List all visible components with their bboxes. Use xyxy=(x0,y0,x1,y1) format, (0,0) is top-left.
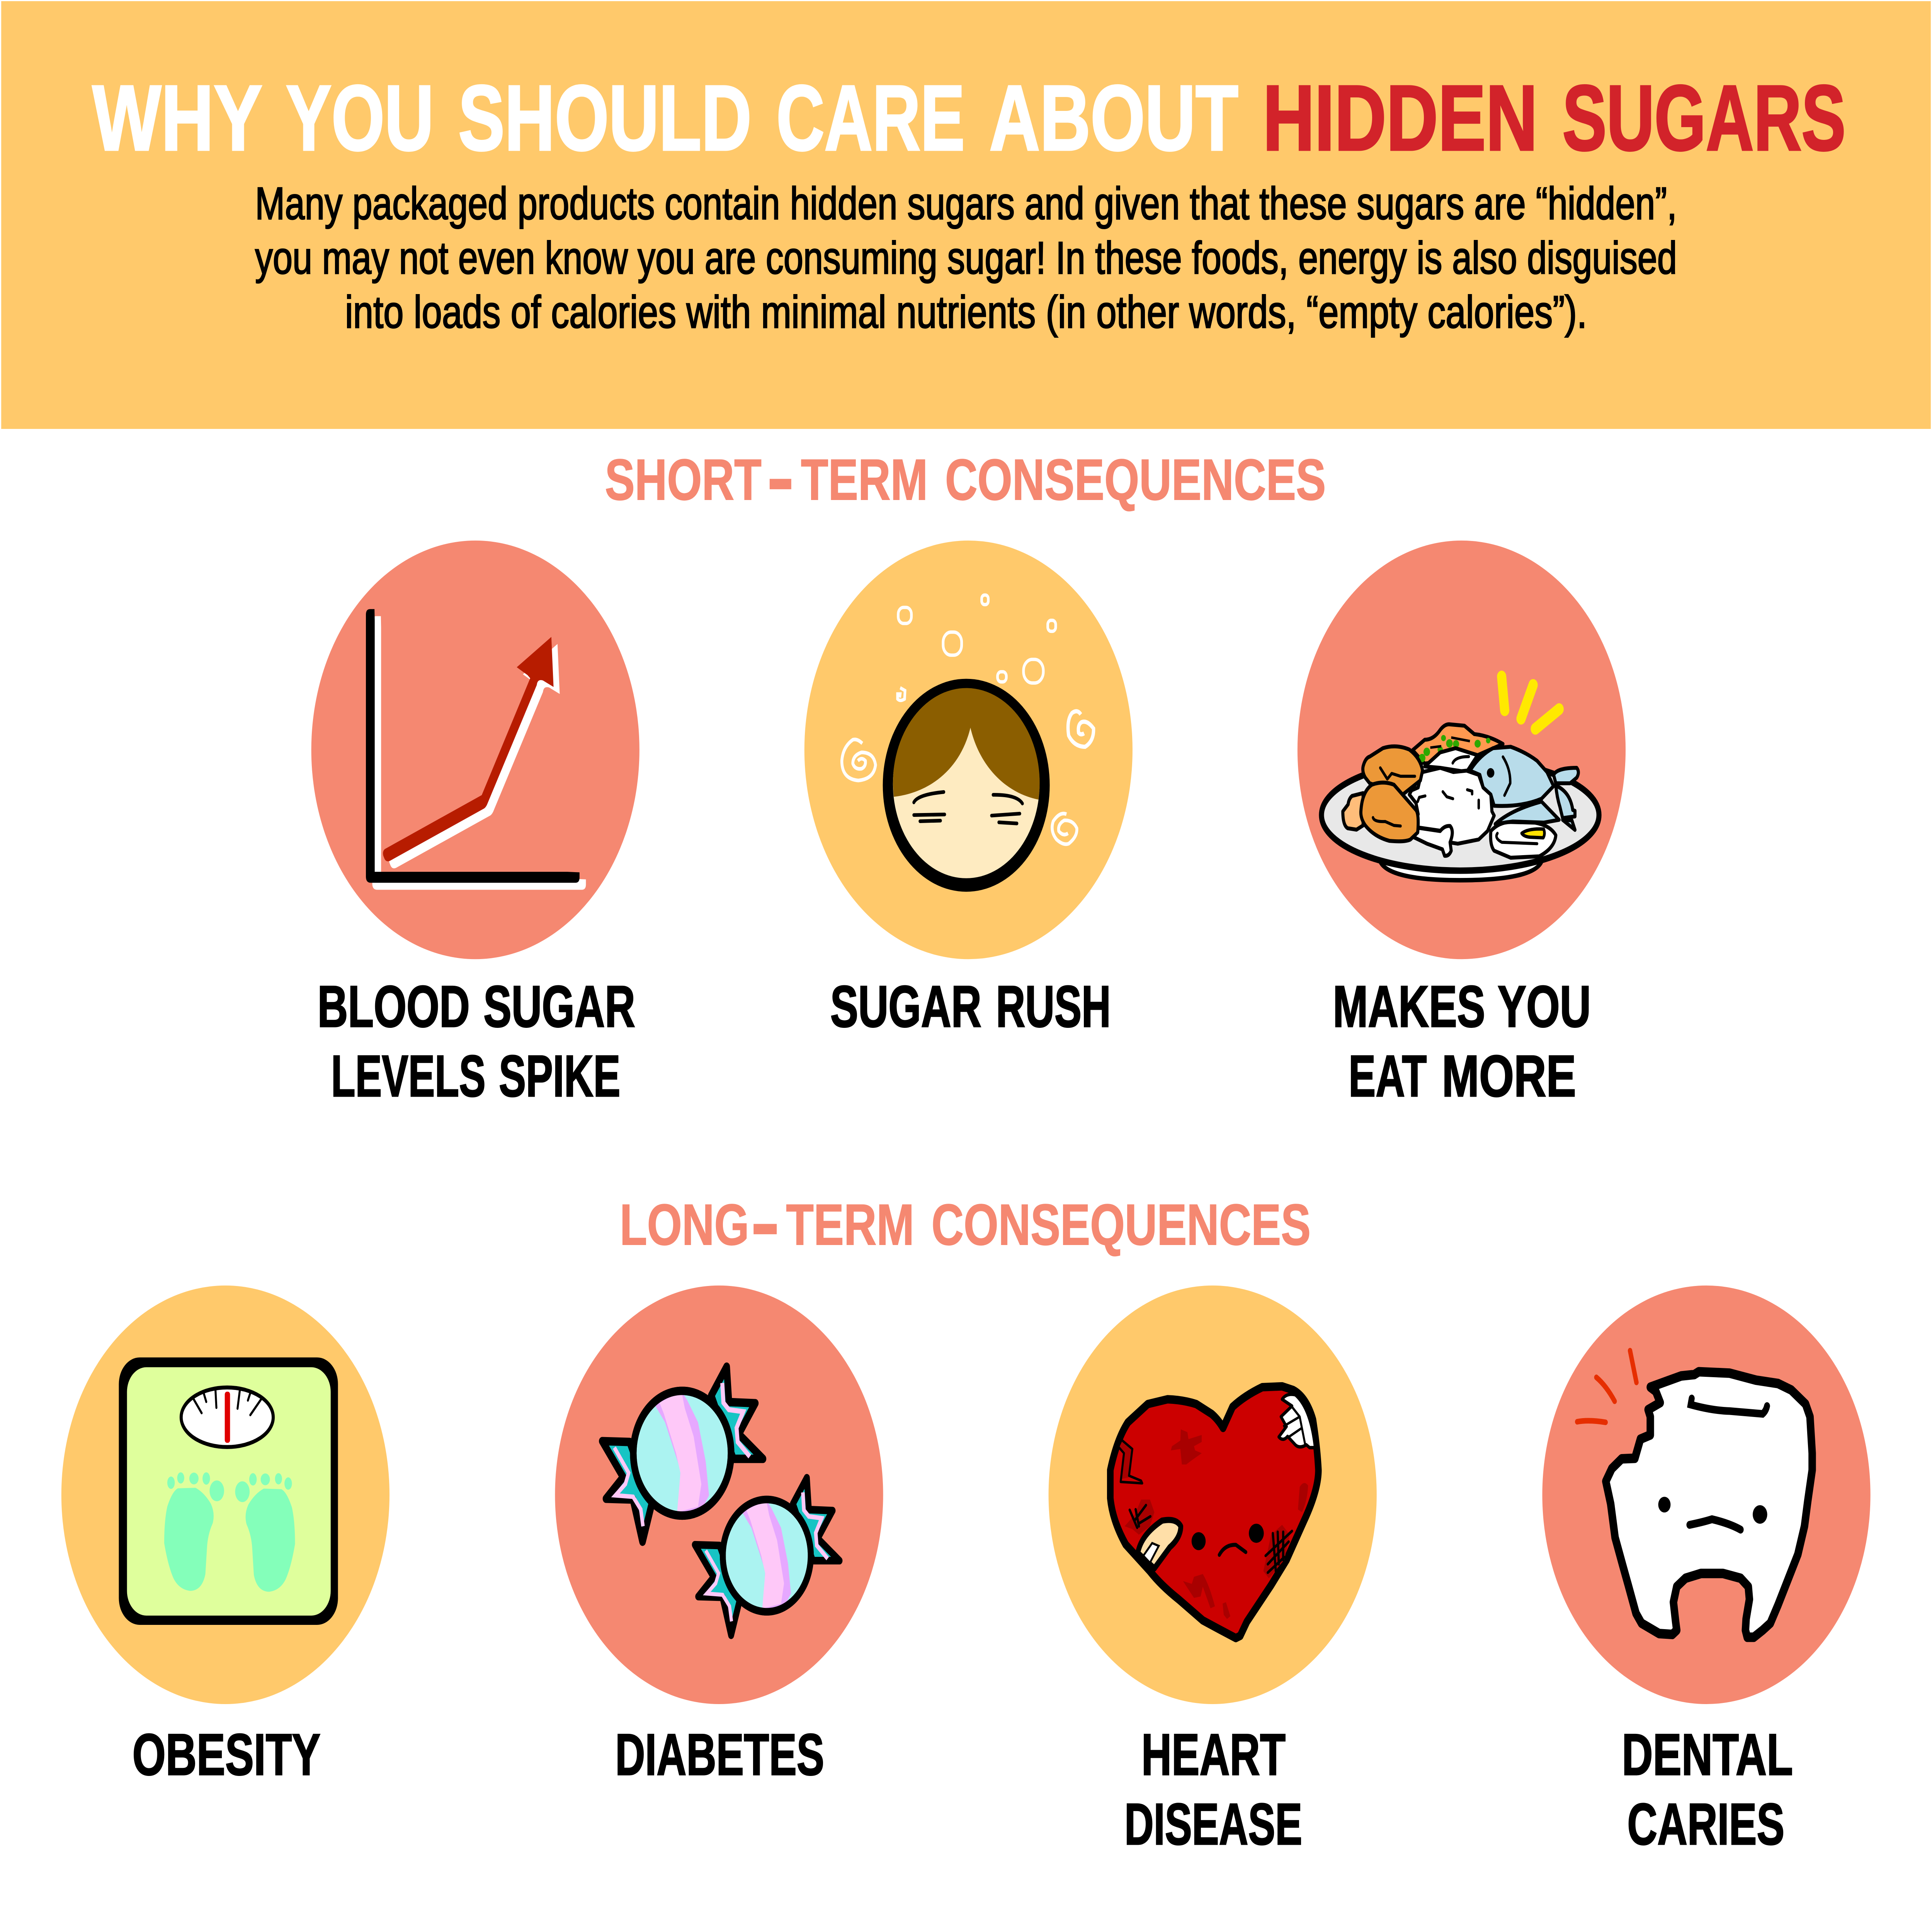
icon: bathroom scale xyxy=(61,1286,389,1704)
heading: short-term consequences: – xyxy=(770,447,791,512)
heading: long-term consequences: LONG xyxy=(620,1192,749,1257)
intro text xyxy=(255,178,1677,338)
item: dental caries xyxy=(1542,1286,1871,1857)
label: LEVELS xyxy=(331,1043,486,1109)
label: RUSH xyxy=(996,973,1111,1039)
heading: short-term consequences: SHORT xyxy=(605,447,762,512)
item: obesity xyxy=(61,1286,389,1787)
item: makes you eat more xyxy=(1298,541,1626,1109)
label: BLOOD xyxy=(318,973,470,1039)
intro text: Many packaged products contain hidden sugars and given that these sugars are “hidden”, xyxy=(255,178,1677,229)
item: blood sugar levels spike xyxy=(311,541,639,1109)
label: EAT xyxy=(1349,1043,1427,1109)
icon: dizzy face xyxy=(804,541,1133,959)
icon: candies xyxy=(555,1286,883,1704)
intro text: into loads of calories with minimal nutrients (in other words, “empty calories”). xyxy=(345,287,1587,338)
heading: short-term consequences xyxy=(605,447,1326,512)
label xyxy=(318,973,635,1109)
item: diabetes xyxy=(555,1286,883,1787)
label: MORE xyxy=(1442,1043,1576,1109)
label: OBESITY xyxy=(133,1721,320,1787)
title: SHOULD xyxy=(458,66,752,170)
label: SPIKE xyxy=(499,1043,621,1109)
header banner xyxy=(1,1,1931,429)
heading: short-term consequences: TERM xyxy=(801,447,928,512)
title: YOU xyxy=(286,66,434,170)
heading: long-term consequences: – xyxy=(754,1192,776,1257)
label: CARIES xyxy=(1627,1791,1784,1857)
title: WHY xyxy=(92,66,262,170)
label: DIABETES xyxy=(615,1721,824,1787)
label xyxy=(1333,973,1591,1109)
heading: long-term consequences: TERM xyxy=(786,1192,914,1257)
heading: long-term consequences: CONSEQUENCES xyxy=(932,1192,1311,1257)
label: SUGAR xyxy=(830,973,981,1039)
title: SUGARS xyxy=(1563,66,1846,170)
intro text: you may not even know you are consuming sugar! In these foods, energy is also disguised xyxy=(255,233,1677,284)
label: HEART xyxy=(1141,1721,1286,1787)
title: CARE xyxy=(776,66,965,170)
title xyxy=(92,66,1846,170)
label xyxy=(830,973,1111,1039)
item: heart disease xyxy=(1049,1286,1377,1857)
icon: plate of food xyxy=(1298,541,1626,959)
label: MAKES xyxy=(1333,973,1485,1039)
heading: short-term consequences: CONSEQUENCES xyxy=(945,447,1326,512)
label: YOU xyxy=(1498,973,1591,1039)
label: DENTAL xyxy=(1622,1721,1793,1787)
heading: long-term consequences xyxy=(620,1192,1311,1257)
item: sugar rush xyxy=(804,541,1133,1039)
label xyxy=(1124,1721,1302,1857)
title: ABOUT xyxy=(989,66,1238,170)
label xyxy=(1622,1721,1793,1857)
icon: rising graph xyxy=(311,541,639,959)
label: DISEASE xyxy=(1124,1791,1302,1857)
title: HIDDEN xyxy=(1263,66,1537,170)
icon: chipped tooth xyxy=(1542,1286,1871,1704)
icon: injured heart xyxy=(1049,1286,1377,1704)
label: SUGAR xyxy=(483,973,635,1039)
